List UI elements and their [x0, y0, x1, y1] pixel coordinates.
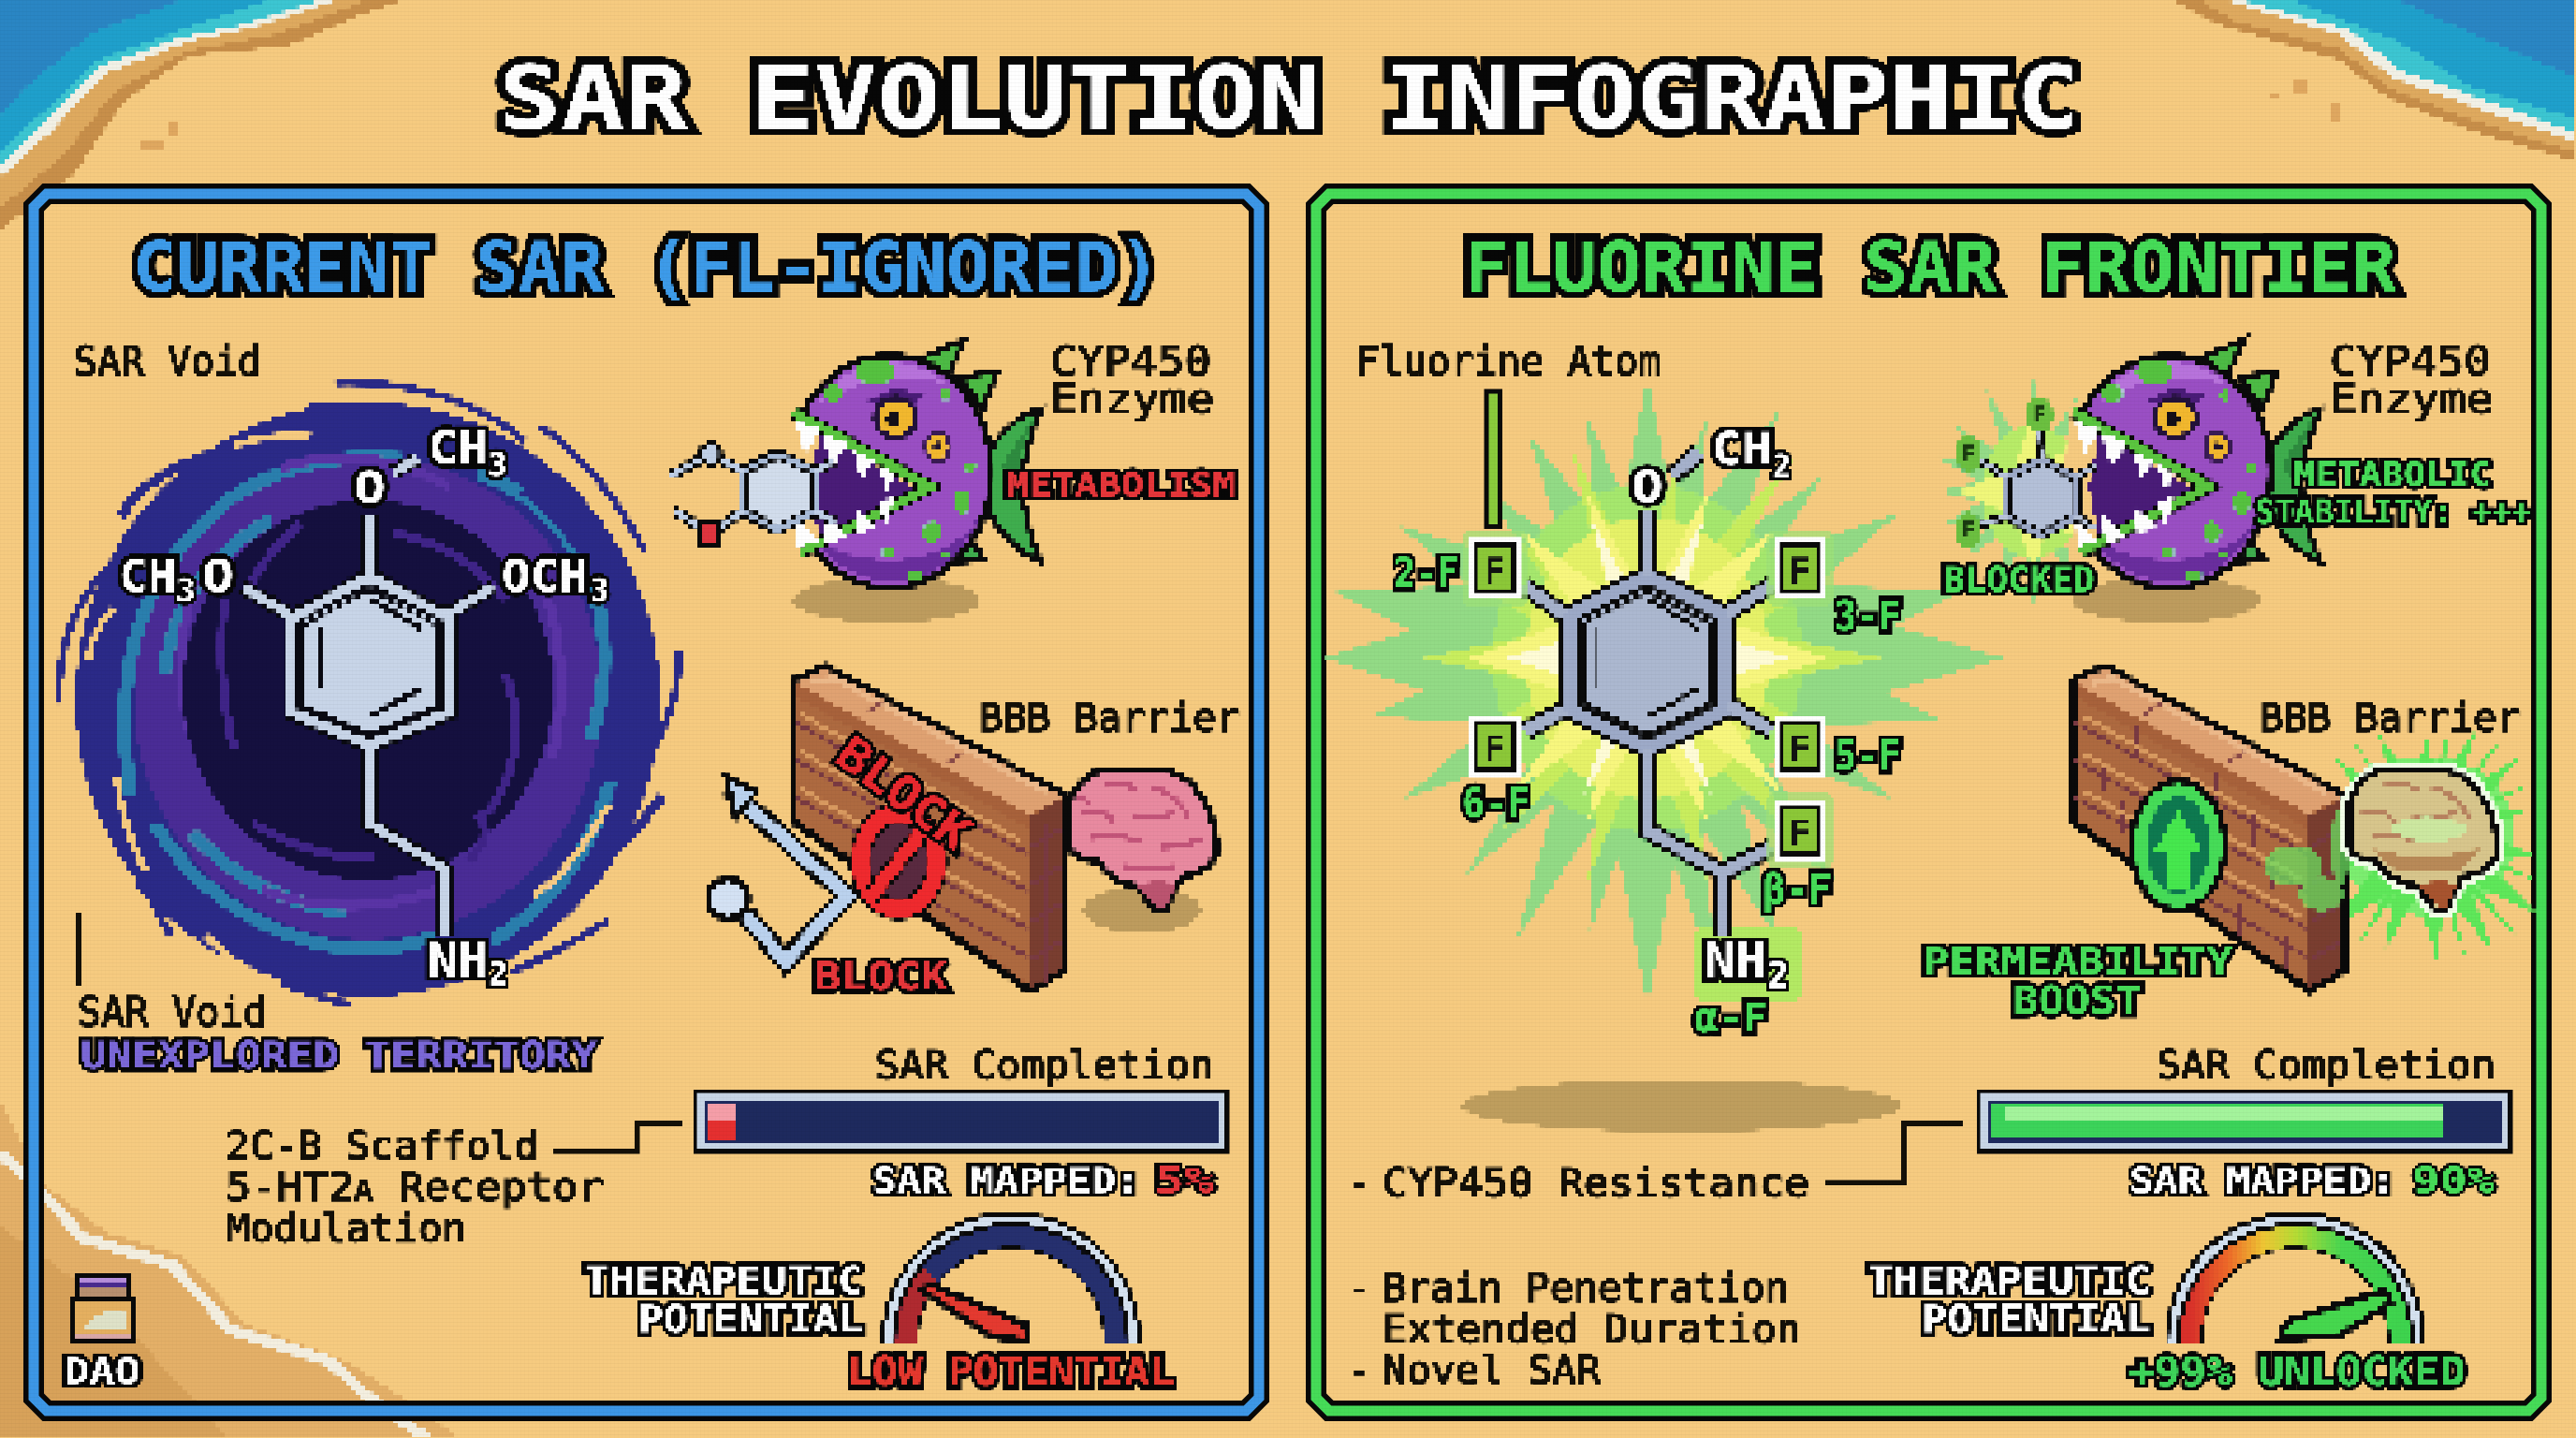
position labels: 6-F: [1462, 780, 1530, 828]
atom labels: 2: [1767, 955, 1789, 996]
icon: F atom 3-F: F: [1790, 550, 1810, 592]
icon: F atom 5-F: F: [1790, 728, 1810, 770]
heading: current SAR: CURRENT SAR (FL-IGNORED): [133, 227, 1161, 308]
label: metabolism: METABOLISM: [1006, 467, 1236, 505]
label: CYP450 Enzyme: Enzyme: [2330, 375, 2494, 423]
text: CYP450 resistance: -: [1350, 1160, 1368, 1206]
text block: benefits: Novel SAR: [1383, 1347, 1602, 1393]
atom labels: CH: [428, 422, 488, 475]
label: therapeutic potential: [584, 1258, 863, 1342]
icon: energised brain: [2349, 770, 2496, 911]
text block: scaffold notes: [226, 1123, 604, 1251]
label: CYP450 Enzyme: Enzyme: [1050, 375, 1214, 423]
label: permeability boost: [1924, 941, 2232, 1023]
text: CYP450 resistance: CYP450 Resistance: [1383, 1160, 1809, 1206]
label: BLOCK: BLOCK: [814, 954, 947, 999]
fluorine atom badges: [1462, 530, 1833, 869]
icon: shield with arrow: [2131, 781, 2225, 910]
label: SAR mapped 5%: [872, 1160, 1214, 1201]
label: CYP450 Enzyme: CYP450: [1050, 338, 1211, 386]
label: therapeutic potential: [1867, 1258, 2151, 1342]
position labels: β-F: [1763, 866, 1832, 914]
panel frame: green border: [1316, 194, 2541, 1411]
icon: BBB brick wall with shield: [2072, 667, 2349, 990]
label: SAR Void: SAR Void: [78, 989, 267, 1036]
atom labels: 2: [489, 956, 507, 993]
position labels: α-F: [1694, 994, 1767, 1042]
position labels: 5-F: [1835, 732, 1901, 780]
label: CYP450 Enzyme: [1050, 338, 1214, 423]
label: BBB Barrier: BBB Barrier: [979, 695, 1240, 741]
text block: benefits: -: [1350, 1265, 1368, 1311]
title: SAR EVOLUTION INFOGRAPHIC: [498, 48, 2079, 150]
text block: benefits: Extended Duration: [1383, 1306, 1801, 1352]
progress bar: 5 percent: [696, 1093, 1226, 1151]
label: +99% unlocked: +99% UNLOCKED: [2129, 1348, 2466, 1396]
atom labels: NH: [428, 933, 488, 988]
label: CYP450 Enzyme: CYP450: [2330, 338, 2491, 386]
callout line: SAR void: [75, 912, 80, 986]
label: therapeutic potential: POTENTIAL: [638, 1297, 863, 1342]
label: therapeutic potential: THERAPEUTIC: [584, 1258, 863, 1303]
label: SAR mapped 5%: 5%: [1154, 1160, 1214, 1201]
atom labels: 3: [590, 572, 608, 609]
icon: SAR void swirl: [59, 383, 679, 1005]
atom labels: NH: [1705, 933, 1766, 990]
label: BBB Barrier: BBB Barrier: [2260, 695, 2521, 741]
connector: resistance to bar: [1826, 1123, 1963, 1183]
atom labels: O: [354, 462, 386, 513]
progress bar: 90 percent: [1980, 1093, 2510, 1151]
text block: scaffold notes: Modulation: [226, 1206, 466, 1251]
connector: 2C-B to bar: [554, 1123, 681, 1151]
shadow: molecule: [1462, 1079, 1900, 1132]
atom labels: [119, 422, 608, 993]
atom labels: 3: [488, 447, 506, 484]
label: SAR Void top: SAR Void: [74, 338, 261, 386]
callout bar: fluorine atom: [1488, 393, 1501, 526]
mini F labels: F: [2033, 402, 2046, 428]
atom labels: OCH: [502, 550, 588, 603]
icon: F atom 2-F: F: [1485, 550, 1505, 592]
panel frame: blue border: [34, 194, 1259, 1411]
label: metabolic stability: STABILITY: +++: [2255, 493, 2531, 532]
mini F labels: [1962, 402, 2046, 543]
label: DAO: DAO: [64, 1351, 140, 1392]
glow: blocked molecule burst: [1930, 379, 2113, 604]
icon: prohibition sign: [860, 814, 937, 909]
text block: scaffold notes: 2C-B Scaffold: [226, 1123, 538, 1168]
icon: F atom 6-F: F: [1485, 728, 1505, 770]
label: permeability boost: BOOST: [2012, 977, 2142, 1023]
icon: F atom beta-F: F: [1790, 813, 1810, 854]
label: SAR Completion: SAR Completion: [2157, 1042, 2496, 1088]
text block: scaffold notes: 5-HT2 A Receptor: [226, 1165, 604, 1210]
label: low potential: LOW POTENTIAL: [847, 1348, 1175, 1396]
glow: brain penetration burst: [2306, 722, 2552, 964]
label: SAR mapped 5%: SAR MAPPED:: [872, 1161, 1140, 1201]
label: BLOCK on wall: BLOCK: [826, 726, 981, 861]
icon: CYP450 enzyme fish eating molecule: [670, 340, 1041, 623]
atom labels: CH: [1711, 423, 1773, 476]
panel: fluorine SAR frontier (right): [1316, 194, 2552, 1411]
text block: benefits: Brain Penetration: [1383, 1265, 1789, 1311]
label: metabolic stability: METABOLIC: [2293, 456, 2492, 494]
label: therapeutic potential: THERAPEUTIC: [1867, 1258, 2151, 1303]
label: permeability boost: PERMEABILITY: [1924, 941, 2232, 982]
icon: F atom beta-F: [1767, 792, 1833, 869]
atom labels: CH: [119, 550, 177, 603]
mini F labels: F: [1962, 441, 1975, 467]
glow on wall: [2265, 810, 2349, 911]
label: therapeutic potential: POTENTIAL: [1922, 1297, 2151, 1342]
label: fluorine atom: Fluorine Atom: [1356, 338, 1661, 386]
text block: benefits: [1350, 1265, 1801, 1393]
position labels: [1394, 550, 1901, 1042]
atom labels: O: [1632, 462, 1663, 512]
icon: F atom 3-F: [1767, 530, 1833, 607]
icon: F atom 5-F: [1777, 718, 1823, 774]
atom labels: 3: [176, 572, 195, 609]
icon: brain: [1069, 770, 1216, 932]
atom labels: 2: [1772, 448, 1791, 486]
label: CYP450 Enzyme: [2330, 338, 2494, 423]
mini F labels: F: [1962, 517, 1975, 543]
gauge: high therapeutic potential: [2173, 1219, 2418, 1342]
atom labels: O: [202, 550, 234, 603]
position labels: 2-F: [1394, 550, 1458, 597]
heading: fluorine SAR frontier: FLUORINE SAR FRONTIER: [1464, 227, 2396, 308]
icon: F atom 2-F: [1462, 530, 1528, 607]
label: SAR mapped 90%: SAR MAPPED:: [2130, 1161, 2395, 1201]
label: metabolic stability: [2255, 456, 2531, 532]
label: SAR mapped 90%: 90%: [2412, 1160, 2495, 1201]
gauge: low therapeutic potential: [888, 1219, 1134, 1342]
arrow: blocked molecule path: [709, 777, 847, 961]
text block: benefits: -: [1350, 1347, 1368, 1393]
glow: fluorine starburst: [1319, 377, 2003, 1005]
icon: DAO jar: [72, 1274, 132, 1340]
icon: BBB brick wall: [793, 667, 1065, 990]
chemical structure: fluorinated scaffold: [1523, 452, 1803, 1002]
atom labels: [1632, 423, 1791, 996]
label: blocked: BLOCKED: [1943, 560, 2095, 600]
label: SAR mapped 90%: [2130, 1160, 2495, 1201]
icon: CYP450 enzyme fish with blocked molecule: [1955, 340, 2320, 623]
chemical structure: 2C-B scaffold: [242, 459, 493, 936]
label: SAR Completion: SAR Completion: [875, 1042, 1214, 1088]
icon: F atom 6-F: [1471, 718, 1518, 774]
label: unexplored territory: UNEXPLORED TERRITORY: [80, 1034, 597, 1078]
position labels: 3-F: [1835, 593, 1901, 640]
panel: current SAR (left): [34, 194, 1259, 1411]
